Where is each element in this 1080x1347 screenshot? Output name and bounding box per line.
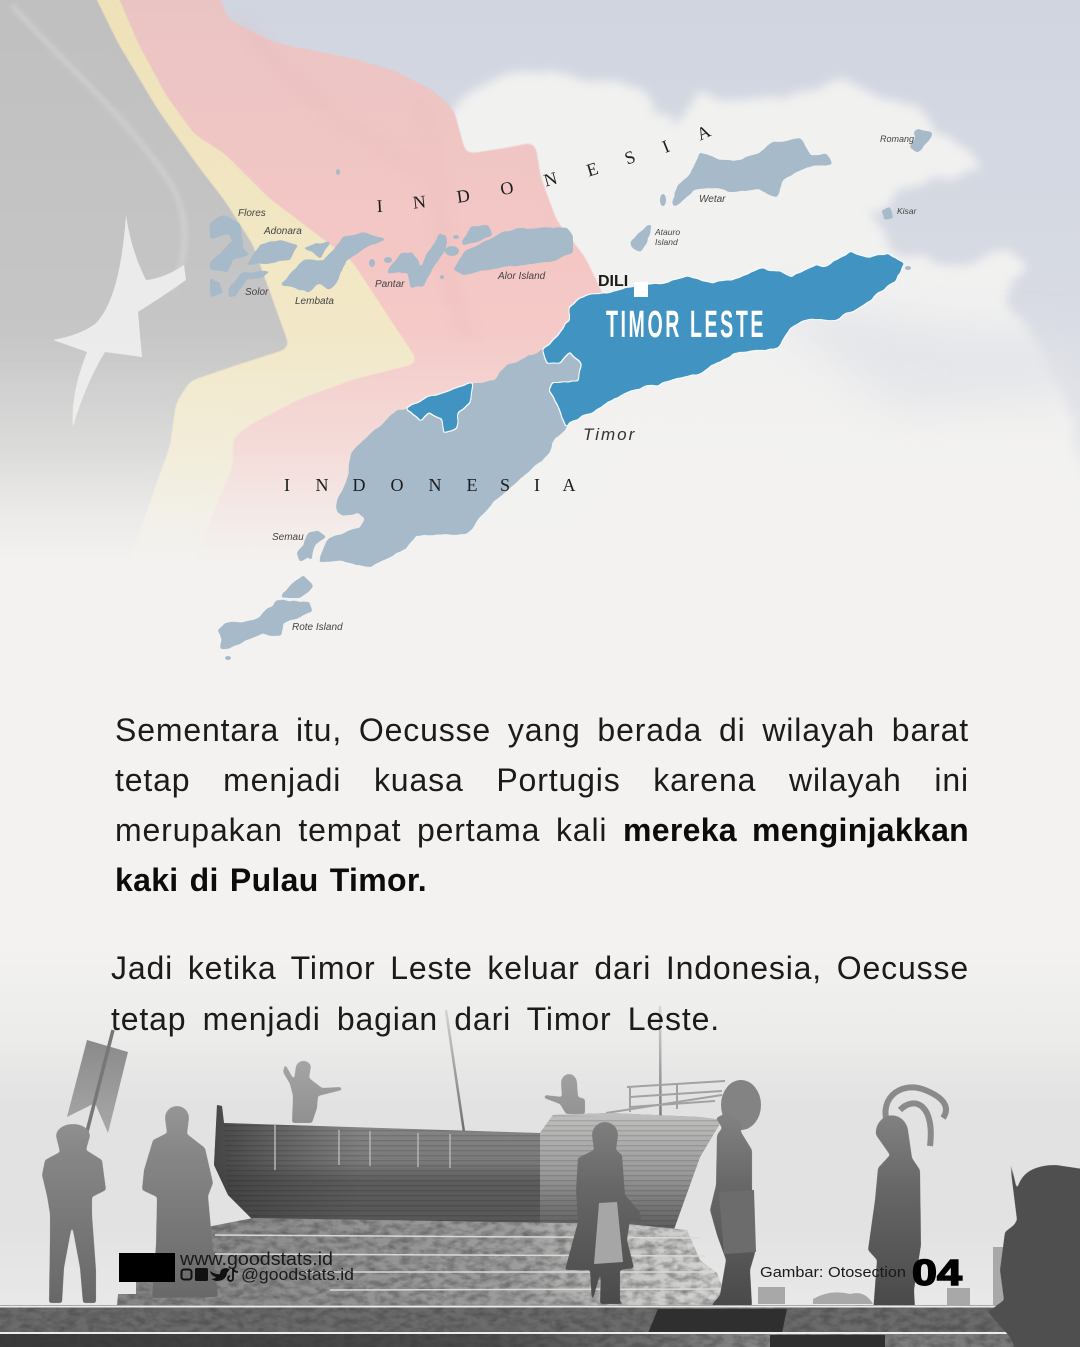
label: INDONESIA lower: A xyxy=(562,475,576,495)
map: Timor Leste mainland xyxy=(543,252,905,427)
warrior with feathers xyxy=(868,1087,946,1347)
warrior with headdress xyxy=(710,1080,761,1306)
map: Oecusse enclave xyxy=(407,383,473,432)
flag star xyxy=(53,215,186,427)
capital marker xyxy=(634,282,648,297)
label: INDONESIA arc: S xyxy=(622,146,638,168)
icon: twitter xyxy=(210,1268,230,1281)
step band xyxy=(0,1305,1080,1334)
dark patch xyxy=(648,1309,885,1347)
small island labels: Wetar xyxy=(699,194,726,205)
flag red folds xyxy=(240,20,470,340)
small island labels: Island xyxy=(655,237,678,247)
background buildings xyxy=(758,1247,1006,1307)
figure tunic xyxy=(594,1202,623,1264)
ship hull ribs xyxy=(275,1125,450,1170)
step highlight xyxy=(0,1306,1080,1333)
small island labels: Adonara xyxy=(263,226,302,237)
small island labels: Atauro xyxy=(654,227,680,237)
label: INDONESIA lower: D xyxy=(352,475,366,495)
ship masts xyxy=(446,1006,660,1132)
label: INDONESIA lower: S xyxy=(500,475,510,495)
label: INDONESIA arc: I xyxy=(659,136,672,157)
statue monument xyxy=(0,1006,1080,1347)
near warrior xyxy=(988,1150,1080,1347)
Semau xyxy=(297,530,327,562)
label: INDONESIA arc: D xyxy=(455,185,471,207)
label: INDONESIA arc: N xyxy=(542,168,559,191)
ship railing xyxy=(606,1081,725,1113)
fade to paper xyxy=(0,330,1080,630)
bottom haze xyxy=(0,945,1080,1347)
child figure on ship xyxy=(283,1061,342,1123)
flag black triangle xyxy=(0,0,290,610)
small island labels: Rote Island xyxy=(292,622,343,633)
label: INDONESIA arc: N xyxy=(412,191,427,213)
hull left shadow xyxy=(214,1105,540,1224)
warrior skirt xyxy=(719,1190,756,1254)
platform grain xyxy=(117,1218,727,1306)
page number: 04 xyxy=(912,1252,962,1293)
body paragraph 1: merupakan tempat pertama kali mereka menginjakkan xyxy=(115,812,969,848)
map: west Timor xyxy=(320,340,590,566)
Atauro xyxy=(629,225,652,252)
footer website: www.goodstats.id xyxy=(179,1249,333,1269)
Rote xyxy=(218,575,313,650)
body paragraph 1 xyxy=(115,712,969,898)
sky background xyxy=(0,0,1080,620)
Wetar xyxy=(672,138,833,207)
body paragraph 1: tetap menjadi kuasa Portugis karena wilayah ini xyxy=(115,762,969,798)
small island labels: Romang xyxy=(880,134,914,144)
label: INDONESIA lower: N xyxy=(428,475,442,495)
flag of Timor Leste xyxy=(0,0,604,610)
label: INDONESIA arc: A xyxy=(693,121,714,144)
Pantar xyxy=(387,233,447,288)
small island labels: Pantar xyxy=(375,279,405,290)
banner xyxy=(67,1040,128,1133)
label: Timor: Timor xyxy=(583,425,636,444)
label: INDONESIA arc xyxy=(376,121,714,216)
Lembata xyxy=(280,232,387,293)
ship hull xyxy=(214,1105,722,1232)
flag red field xyxy=(100,0,604,610)
body paragraph 1: Sementara itu, Oecusse yang berada di wilayah barat xyxy=(115,712,969,748)
platform steps xyxy=(215,1235,722,1290)
banner pole xyxy=(60,1030,113,1237)
step grain xyxy=(0,1305,1080,1347)
warrior body xyxy=(868,1115,921,1347)
small island labels: Solor xyxy=(245,287,269,298)
small island labels: Lembata xyxy=(295,296,334,307)
label: INDONESIA arc: I xyxy=(376,196,383,216)
small island labels: Flores xyxy=(238,208,266,219)
small island labels: Alor Island xyxy=(497,271,546,282)
flag yellow stripe xyxy=(70,0,419,610)
label: INDONESIA lower xyxy=(284,475,576,495)
small islets xyxy=(225,169,911,660)
flag black folds xyxy=(12,5,185,290)
body paragraph 2 xyxy=(111,950,969,1037)
armored figure xyxy=(565,1122,642,1304)
footer social icons xyxy=(182,1268,238,1281)
icon: tiktok xyxy=(228,1268,238,1281)
warrior body xyxy=(710,1112,755,1306)
headdress xyxy=(721,1080,761,1130)
Romang xyxy=(910,128,932,152)
icon: facebook xyxy=(195,1268,208,1281)
body paragraph 2: tetap menjadi bagian dari Timor Leste. xyxy=(111,1001,720,1037)
clouds xyxy=(300,67,1080,620)
Kisar xyxy=(881,207,893,220)
soldier with banner xyxy=(42,1030,128,1303)
label: INDONESIA lower: E xyxy=(466,475,478,495)
monk statue xyxy=(142,1106,218,1298)
hull planks xyxy=(224,1115,722,1232)
Adonara xyxy=(247,240,298,265)
steps foreground xyxy=(0,1305,1080,1347)
label: TIMOR LESTE: TIMOR LESTE xyxy=(606,304,766,346)
Solor xyxy=(228,270,272,297)
label: INDONESIA lower: N xyxy=(316,475,328,495)
Flores xyxy=(210,215,250,297)
small island labels: Semau xyxy=(272,532,304,543)
footer handle: @goodstats.id xyxy=(241,1265,354,1284)
label: INDONESIA lower: O xyxy=(390,475,404,495)
map: Indonesian islands xyxy=(210,128,932,660)
ship deck figure xyxy=(544,1074,585,1114)
label: DILI: DILI xyxy=(598,273,628,290)
image credit: Gambar: Otosection xyxy=(760,1264,906,1281)
lower step xyxy=(0,1334,1080,1347)
monument platform xyxy=(117,1218,727,1306)
feathers xyxy=(885,1087,946,1146)
small island labels xyxy=(238,134,918,633)
label: INDONESIA arc: O xyxy=(499,177,515,199)
small island labels: Kisar xyxy=(897,206,918,216)
label: INDONESIA lower: I xyxy=(534,475,540,495)
body paragraph 1: kaki di Pulau Timor. xyxy=(115,862,427,898)
label: INDONESIA lower: I xyxy=(284,475,290,495)
icon: instagram xyxy=(182,1270,192,1280)
label: INDONESIA arc: E xyxy=(584,158,600,180)
body paragraph 2: Jadi ketika Timor Leste keluar dari Indonesia, Oecusse xyxy=(111,950,969,986)
footer logo block xyxy=(119,1253,175,1282)
soldier body xyxy=(42,1124,106,1303)
figure body xyxy=(565,1122,642,1304)
ship stern lighter planks xyxy=(540,1113,722,1232)
Alor xyxy=(453,225,573,275)
